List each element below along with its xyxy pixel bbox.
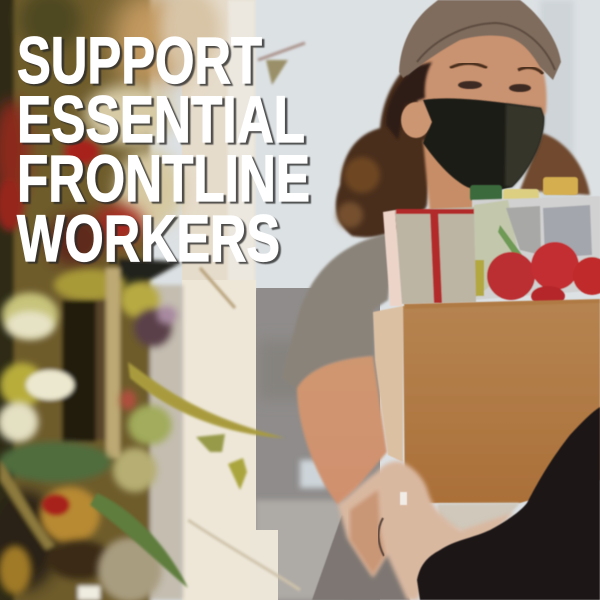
glove darker fingers: [350, 490, 385, 575]
cap: [399, 0, 561, 80]
bottles: [470, 185, 502, 201]
stems and leaves in focus: [90, 43, 305, 590]
headline: [17, 23, 312, 277]
arm: [297, 356, 387, 505]
curly hair left: [336, 68, 433, 237]
gloved hands: [338, 461, 515, 600]
contents under box: [437, 503, 520, 535]
headline text: WORKERS: [17, 201, 280, 275]
glove highlight: [400, 492, 407, 505]
wrist band: [379, 518, 384, 556]
headline shadow: ESSENTIAL: [20, 84, 308, 158]
curl highlights: [337, 157, 380, 228]
woman holding box: [282, 0, 590, 600]
headline shadow: WORKERS: [20, 203, 282, 277]
headline text: [17, 23, 310, 275]
dark sleeve: [417, 407, 600, 600]
eyebrow right: [518, 67, 543, 74]
dark hair by temple: [386, 62, 432, 140]
mask shaded right: [505, 104, 544, 187]
eye right: [509, 84, 531, 92]
background: blurred flowers: [0, 0, 220, 600]
tomatoes: [487, 252, 535, 300]
cardboard box: [373, 299, 600, 503]
curly hair right: [520, 133, 590, 195]
headline text: ESSENTIAL: [17, 82, 305, 156]
headline text: SUPPORT: [17, 23, 262, 97]
ear: [401, 102, 431, 138]
face mask: [423, 98, 544, 191]
shirt upper: [282, 232, 395, 388]
headline shadow: SUPPORT: [20, 25, 264, 99]
groceries: [383, 177, 600, 306]
cap brim line: [417, 23, 555, 70]
headline text: FRONTLINE: [17, 141, 310, 215]
eyebrow left: [450, 64, 487, 68]
eye left: [458, 81, 482, 89]
cartons: [383, 210, 402, 306]
headline shadow: [20, 25, 312, 277]
neck: [423, 140, 500, 215]
face: [416, 28, 547, 160]
shirt lower: [312, 515, 410, 600]
headline shadow: FRONTLINE: [20, 143, 312, 217]
